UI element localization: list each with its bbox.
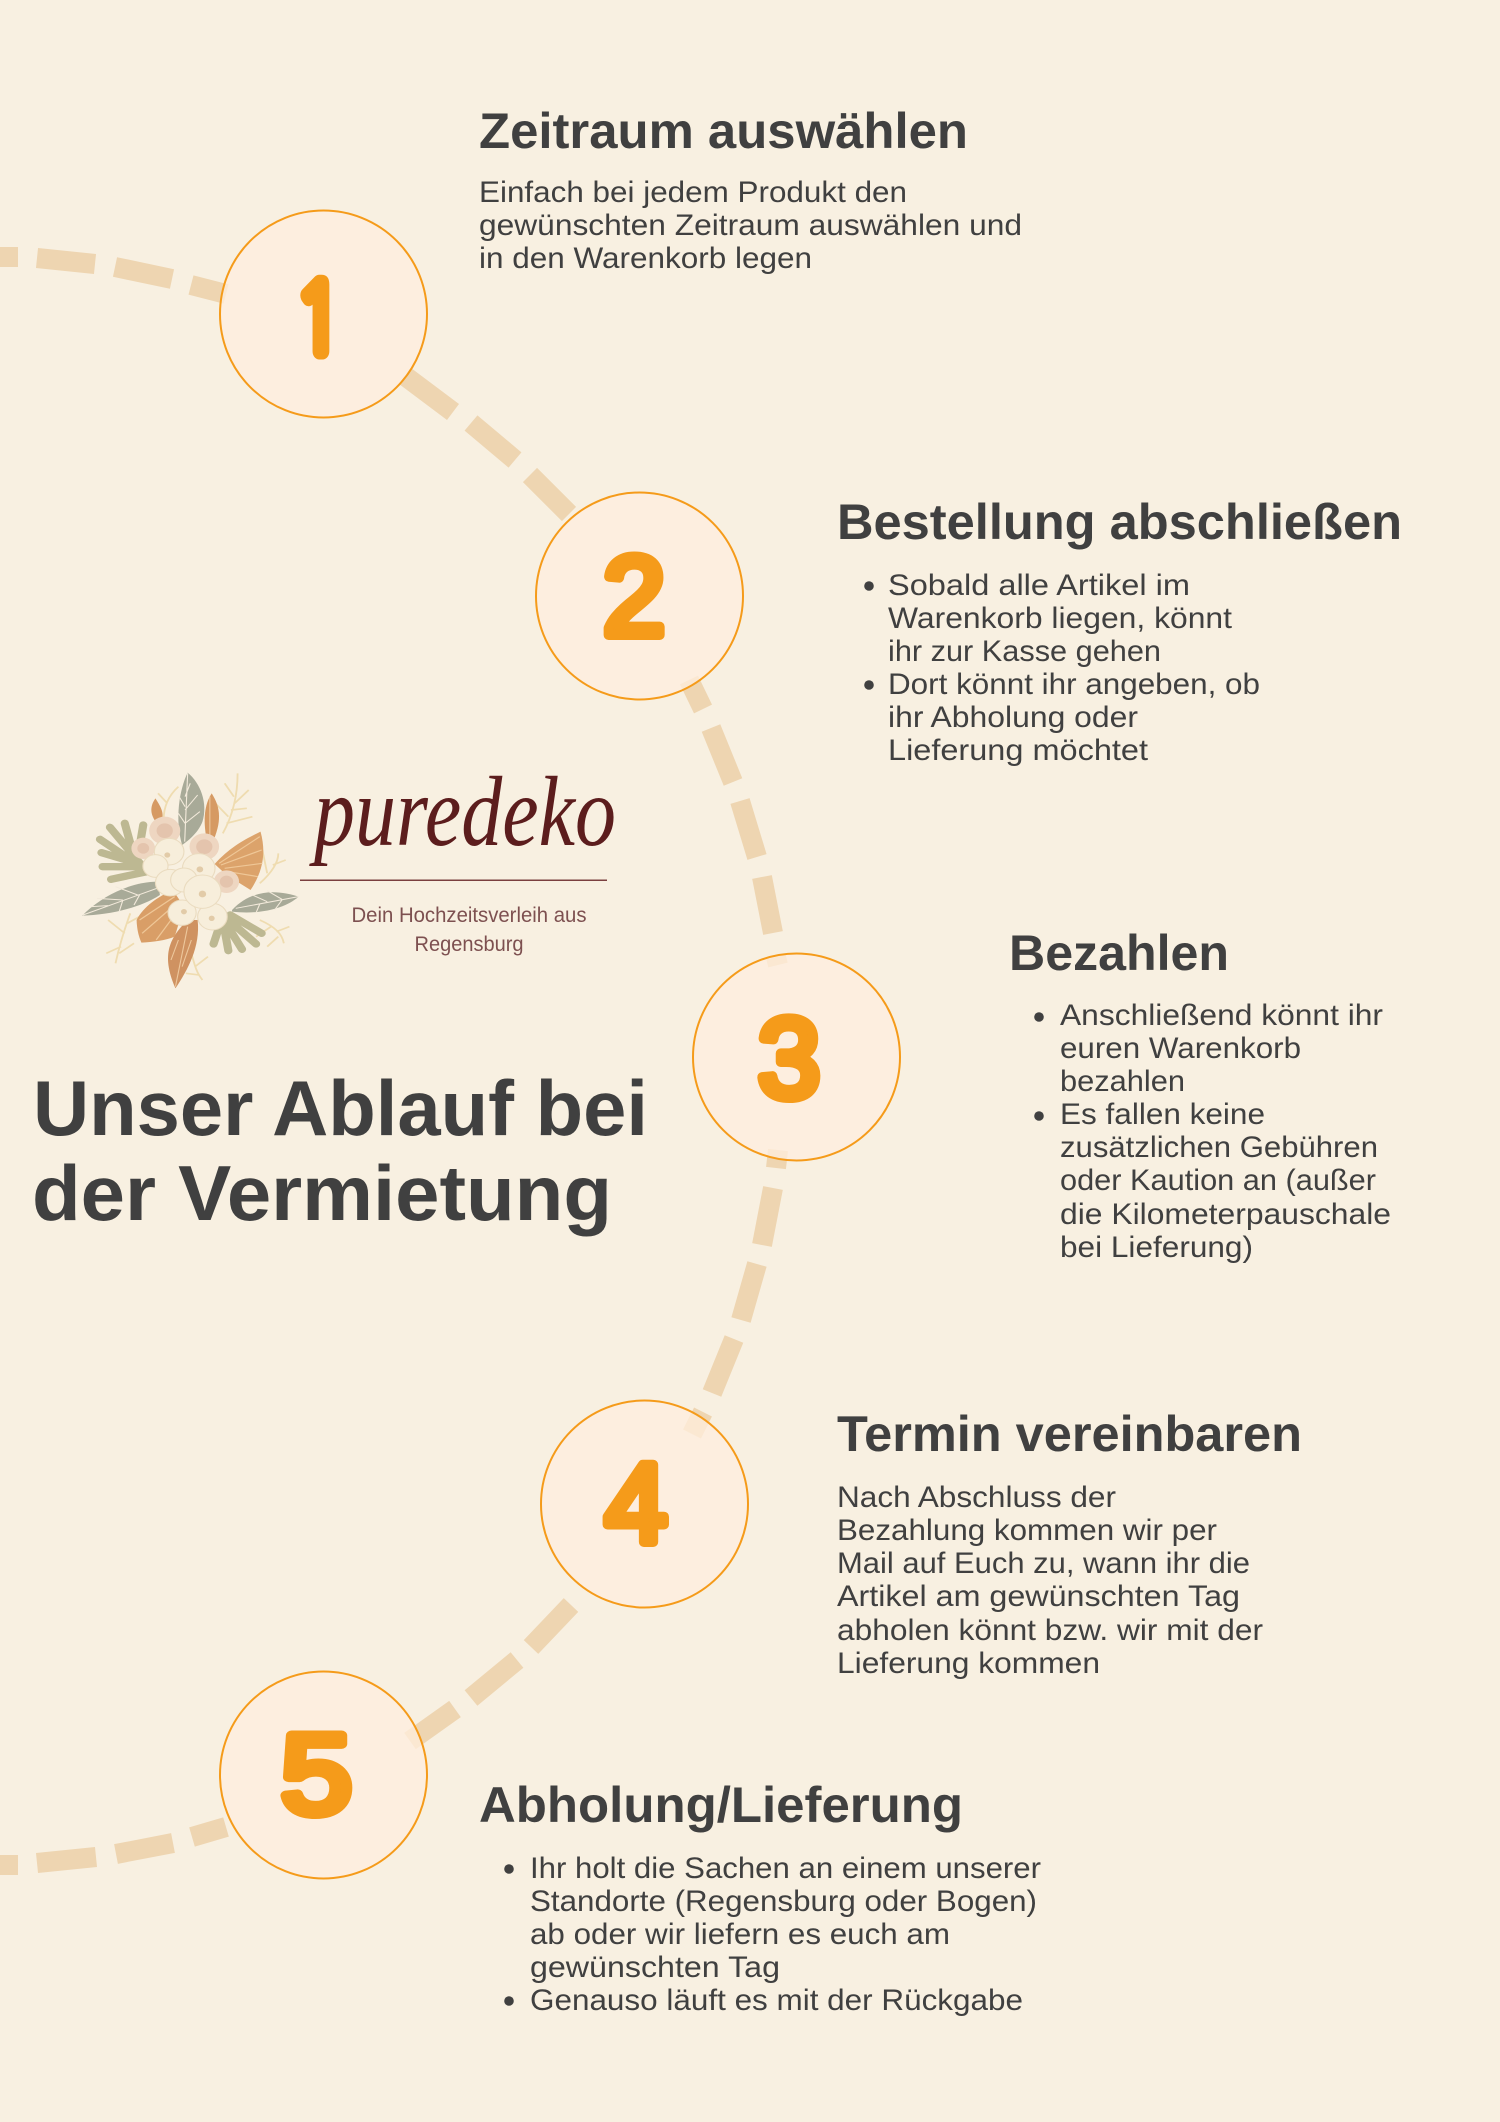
heading: Zeitraum auswählen: Zeitraum auswählen (479, 103, 968, 159)
dashed arc connecting the steps (0, 257, 778, 1865)
olive palm rays (100, 823, 262, 951)
description step 4: Mail auf Euch zu, wann ihr die (837, 1547, 1250, 1580)
description step 4: Nach Abschluss der (837, 1481, 1116, 1514)
step 2 text (837, 494, 1402, 767)
pampas tufts (151, 793, 219, 988)
tagline (352, 903, 586, 956)
description step 1 (479, 176, 1022, 275)
rose blooms (131, 817, 239, 893)
description step 5: Genauso läuft es mit der Rückgabe (530, 1984, 1023, 2017)
wordmark: puredeko (309, 756, 616, 867)
heading: Bezahlen: Bezahlen (1009, 925, 1229, 981)
grey fern leaves (82, 773, 299, 916)
heading: Bestellung abschließen: Bestellung abschließen (837, 494, 1402, 550)
description step 4: Lieferung kommen (837, 1647, 1100, 1680)
description step 1: gewünschten Zeitraum auswählen und (479, 209, 1022, 242)
main title: der Vermietung (32, 1149, 612, 1237)
step circle 3 (693, 954, 900, 1160)
description step 4: abholen könnt bzw. wir mit der (837, 1614, 1263, 1647)
orange palm fans (215, 832, 263, 890)
step 5 text (479, 1777, 1041, 2017)
description step 3: oder Kaution an (außer (1060, 1164, 1376, 1197)
description step 3: die Kilometerpauschale (1060, 1198, 1391, 1231)
step 4 text (837, 1406, 1302, 1680)
main title: Unser Ablauf bei (33, 1064, 648, 1152)
description step 2: Dort könnt ihr angeben, ob (888, 668, 1260, 701)
description step 5 (504, 1852, 1041, 2017)
step circle 2 (536, 492, 743, 700)
number 3: 3 (758, 996, 820, 1121)
description step 4: Artikel am gewünschten Tag (837, 1580, 1240, 1613)
number 1: 1 (295, 271, 342, 366)
description step 2: ihr zur Kasse gehen (888, 635, 1161, 668)
description step 4 (837, 1481, 1263, 1680)
description step 3: bezahlen (1060, 1065, 1185, 1098)
number 2: 2 (603, 534, 665, 659)
heading: Termin vereinbaren: Termin vereinbaren (837, 1406, 1302, 1462)
icon: dried flower bouquet (82, 773, 299, 988)
description step 3: Anschließend könnt ihr (1060, 999, 1383, 1032)
number 5: 5 (281, 1712, 352, 1837)
main title (32, 1064, 648, 1237)
step 3 text (1009, 925, 1391, 1264)
heading: Abholung/Lieferung: Abholung/Lieferung (479, 1777, 963, 1833)
description step 5: Standorte (Regensburg oder Bogen) (530, 1885, 1037, 1918)
description step 3: euren Warenkorb (1060, 1032, 1301, 1065)
step circle 5 (220, 1672, 427, 1878)
tagline: Dein Hochzeitsverleih aus (352, 903, 586, 927)
step 1 text (479, 103, 1022, 275)
step circle 4 (541, 1400, 748, 1608)
description step 3: Es fallen keine (1060, 1098, 1265, 1131)
tagline: Regensburg (414, 932, 524, 956)
description step 3 (1034, 999, 1391, 1264)
description step 4: Bezahlung kommen wir per (837, 1514, 1217, 1547)
description step 3: bei Lieferung) (1060, 1231, 1253, 1264)
divider line (300, 880, 607, 881)
description step 2: Lieferung möchtet (888, 734, 1149, 767)
description step 5: gewünschten Tag (530, 1951, 780, 1984)
white orchids (143, 838, 227, 930)
step circle 1 (220, 210, 427, 418)
description step 2: Warenkorb liegen, könnt (888, 602, 1233, 635)
description step 5: Ihr holt die Sachen an einem unserer (530, 1852, 1041, 1885)
description step 2 (864, 569, 1260, 767)
description step 2: Sobald alle Artikel im (888, 569, 1190, 602)
number 4: 4 (605, 1441, 667, 1566)
description step 2: ihr Abholung oder (888, 701, 1138, 734)
description step 1: in den Warenkorb legen (479, 242, 812, 275)
logo: puredeko (82, 756, 616, 988)
description step 5: ab oder wir liefern es euch am (530, 1918, 950, 1951)
description step 3: zusätzlichen Gebühren (1060, 1131, 1378, 1164)
description step 1: Einfach bei jedem Produkt den (479, 176, 907, 209)
